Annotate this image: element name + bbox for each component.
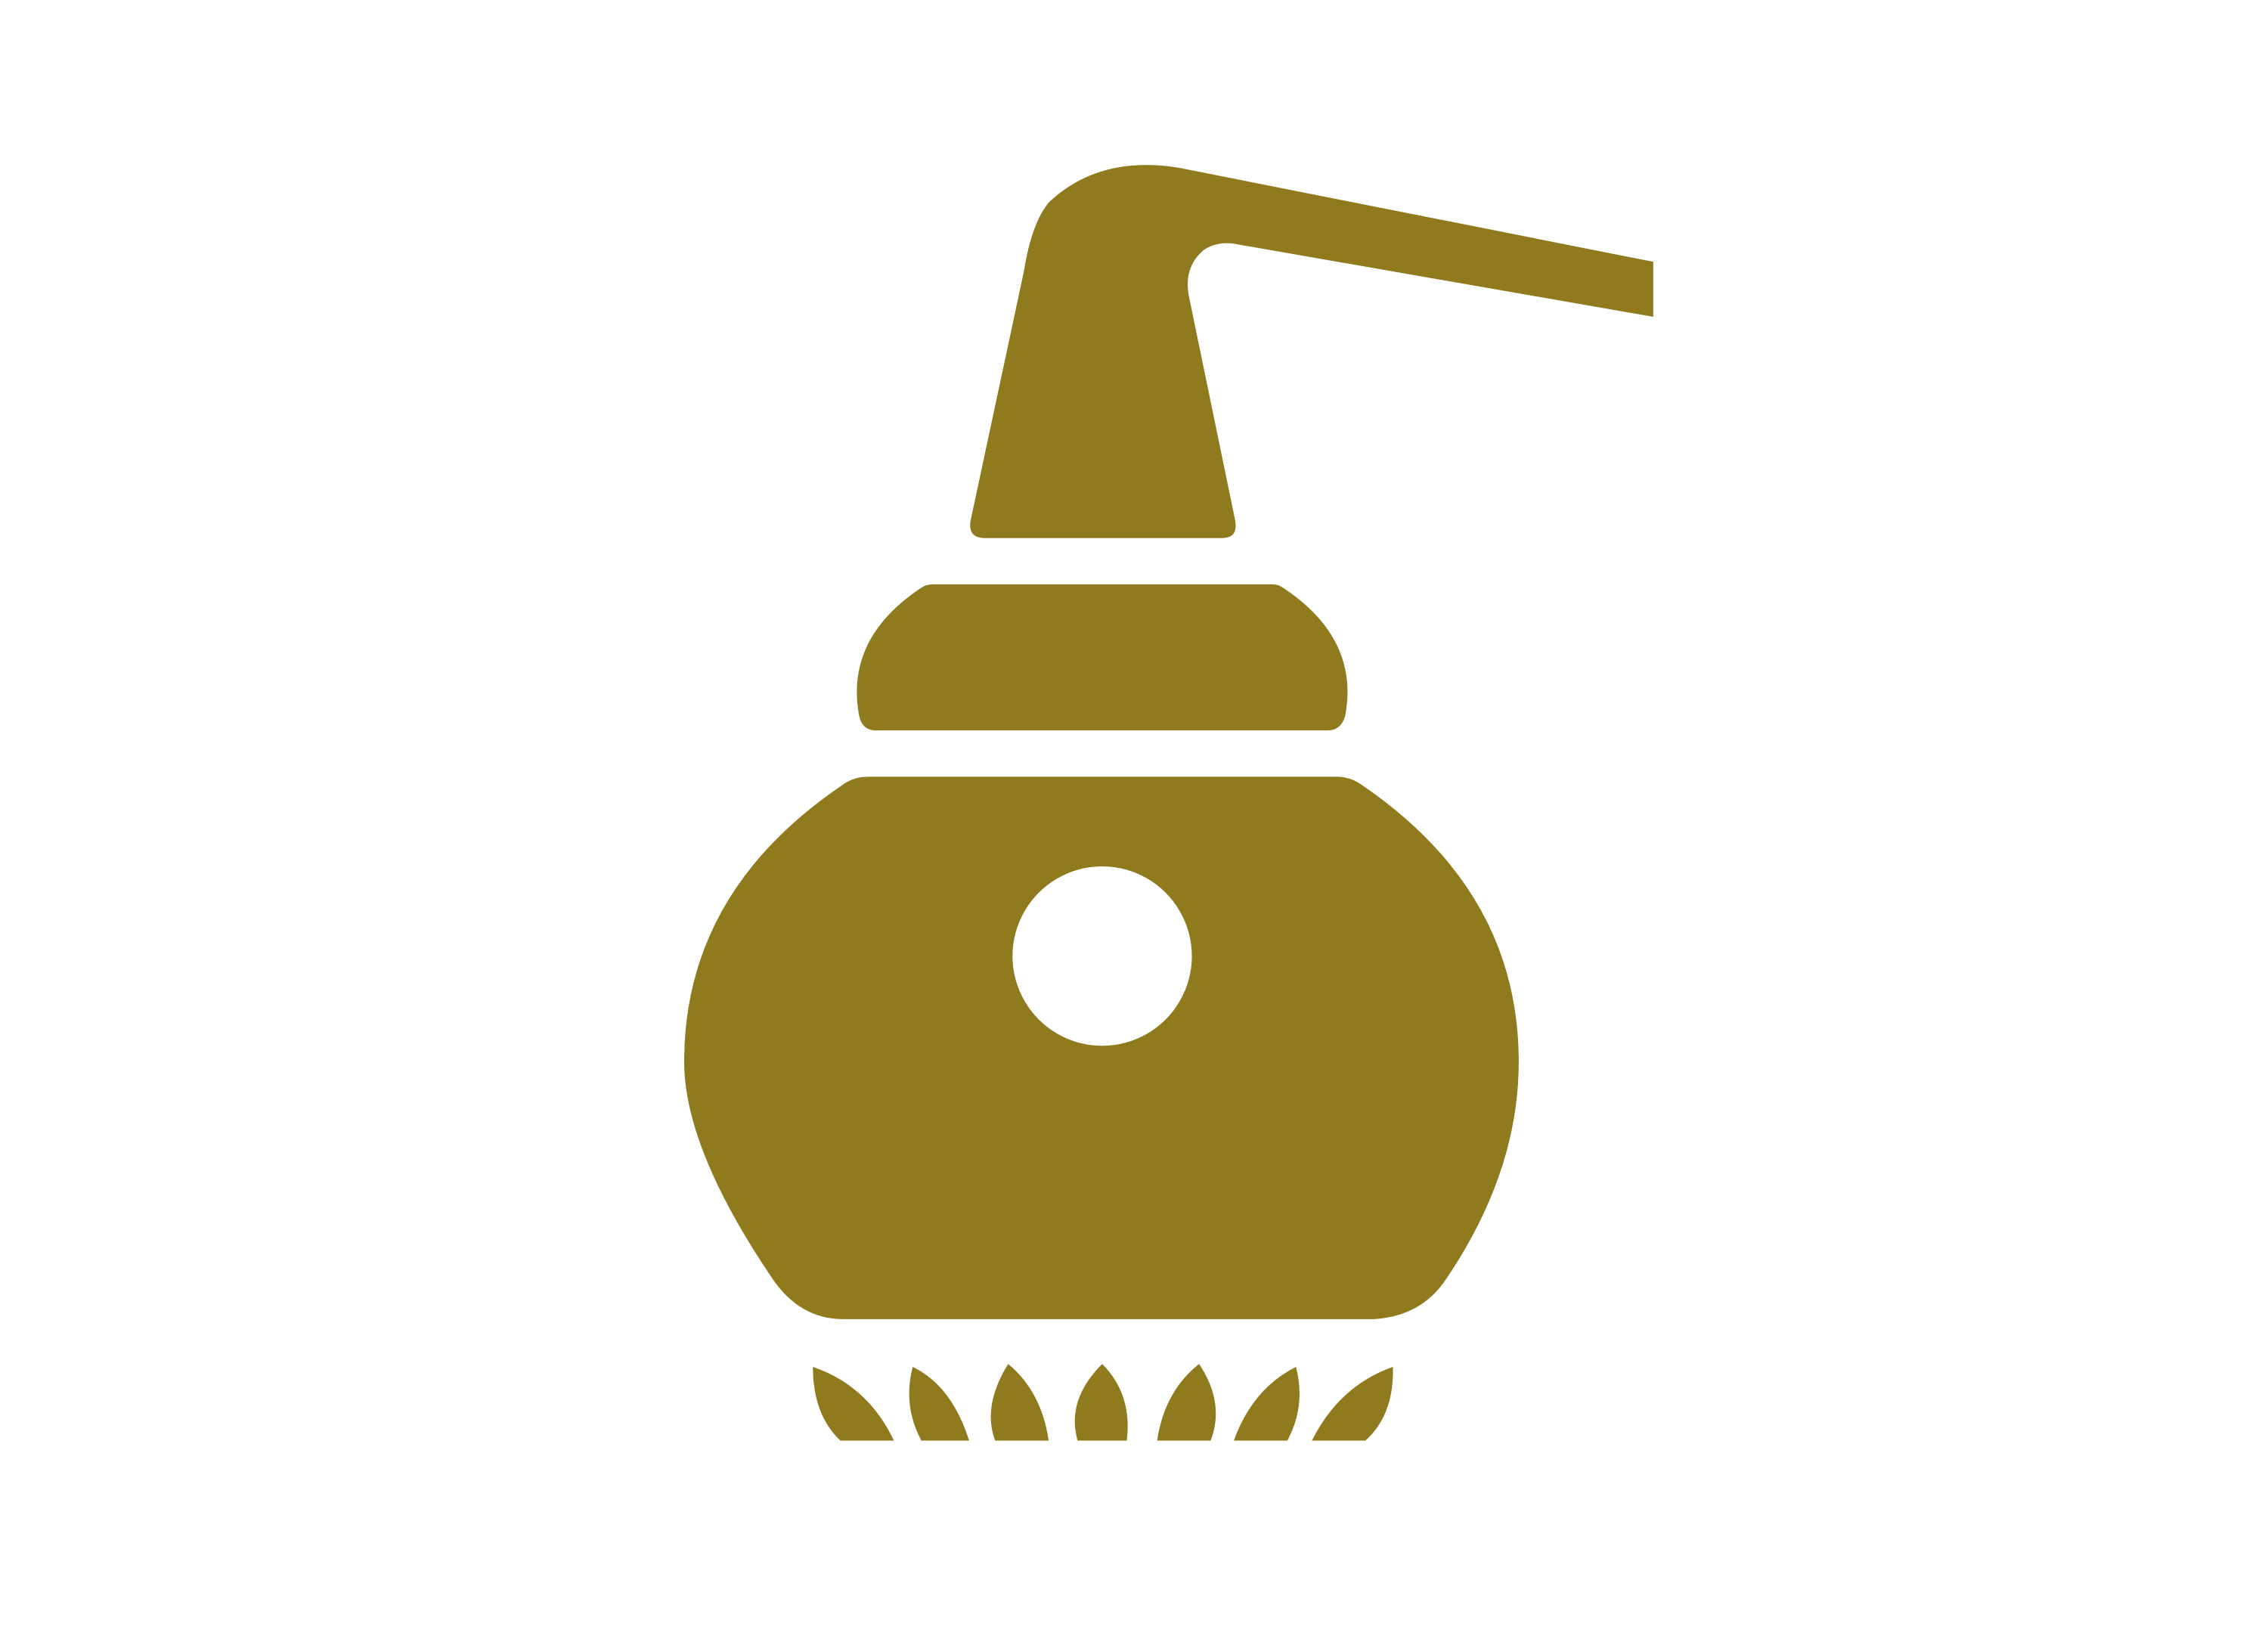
icon: middle cap (857, 584, 1347, 730)
icon: pot body with round window (684, 776, 1519, 1319)
icon: spout / swan neck (970, 165, 1653, 538)
icon: flames (813, 1364, 1393, 1441)
